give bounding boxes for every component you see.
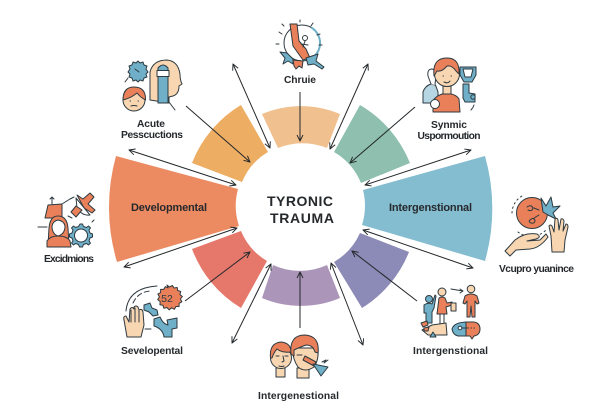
label: Synmic Uspormoution: Synmic: [431, 120, 467, 131]
centre title: TYRONIC: [267, 193, 333, 209]
icon: two faces with blue cone (Intergenestional): [270, 335, 328, 378]
label: Synmic Uspormoution: Uspormoution: [418, 131, 480, 142]
wedge label: Developmental: Developmental: [131, 202, 207, 214]
icon: smiling person with inhaler (Synmic): [423, 58, 476, 112]
centre title: TRAUMA: [270, 210, 334, 226]
label: Vcupro yuanince: Vcupro yuanince: [499, 264, 574, 275]
wedge: purple bottom: [262, 265, 340, 306]
label: Acute Pesscuctions: [121, 119, 183, 141]
icon: woman, gear, machine (Excidmions): [38, 193, 95, 247]
label: Intergenestional: Intergenestional: [258, 391, 339, 402]
icon: magnifier with orange figure (Chruie): [276, 20, 324, 69]
wedge label: Intergenstionnal: Intergenstionnal: [389, 202, 472, 214]
label: Acute Pesscuctions: Acute: [137, 119, 165, 130]
icon: hand, burst and pipes (Sevelopental): 52: [161, 293, 173, 305]
icon: figures and speech bubble (Intergenstional): [421, 285, 480, 339]
icon: head, gear and face (Acute): [123, 60, 182, 111]
label: Sevelopental: Sevelopental: [121, 346, 183, 357]
label: Synmic Uspormoution: [418, 120, 480, 142]
wedge: green top right: [334, 105, 410, 183]
icon: hand, burst and pipes (Sevelopental): [124, 285, 182, 337]
wedge: violet bottom right: [334, 233, 409, 308]
wedge: red bottom left: [192, 231, 267, 308]
centre title: [267, 193, 334, 226]
wedge: peach top: [262, 106, 340, 148]
wedge: orange top left: [192, 105, 268, 182]
label: Excidmions: Excidmions: [44, 254, 94, 265]
label: Acute Pesscuctions: Pesscuctions: [121, 130, 183, 141]
wedge: Intergenerational: [362, 156, 492, 261]
label: Chruie: Chruie: [284, 75, 316, 86]
arrows: [124, 64, 473, 345]
icon: open hand with orange medallion (Vcupro yuanince): [505, 195, 568, 256]
wedge: Developmental: [109, 156, 239, 262]
label: Intergenstional: Intergenstional: [413, 346, 488, 357]
